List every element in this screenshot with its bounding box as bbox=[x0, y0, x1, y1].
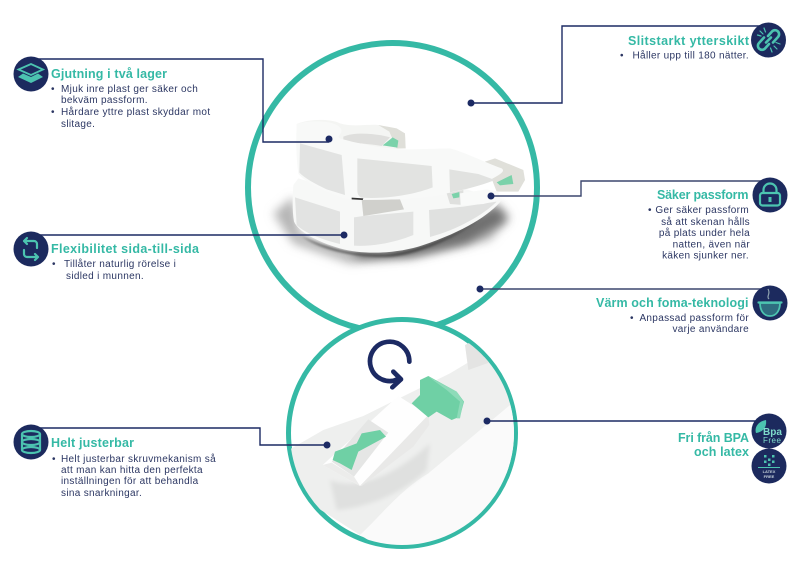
text block: Gjutning i två lager: Gjutning i två lager bbox=[51, 67, 167, 81]
large teal circle with mouthguard bbox=[38, 26, 770, 332]
text block: Flexibilitet sida-till-sida: Flexibilitet sida-till-sida bbox=[51, 242, 200, 256]
text block: Helt justerbar: • bbox=[52, 454, 56, 465]
callout: Säker passform connector line bbox=[488, 181, 770, 200]
text block: Värm och foma-teknologi: Anpassad passform för bbox=[639, 313, 749, 324]
text block: Slitstarkt ytterskikt bbox=[620, 34, 750, 62]
text block: Helt justerbar: inställningen för att behandla bbox=[61, 476, 199, 487]
icon: BPA free bbox=[752, 414, 786, 448]
text block: Slitstarkt ytterskikt: Håller upp till 180 nätter. bbox=[633, 50, 749, 62]
icon: BPA free: Bpa bbox=[763, 427, 782, 438]
text block: Gjutning i två lager: Mjuk inre plast ger säker och bbox=[61, 84, 198, 95]
small teal circle with screw detail bbox=[38, 317, 770, 563]
text block: Värm och foma-teknologi: Värm och foma-teknologi bbox=[596, 296, 748, 310]
text block: Säker passform: natten, även när bbox=[673, 240, 750, 250]
callout: Värm connector line bbox=[476, 286, 770, 292]
text block: Gjutning i två lager: slitage. bbox=[61, 119, 95, 130]
text block: Fri från BPA och latex bbox=[678, 431, 749, 459]
text block: Säker passform bbox=[648, 188, 750, 262]
icon: layers bbox=[14, 56, 48, 92]
text block: Säker passform: Säker passform bbox=[657, 188, 748, 202]
callout: Gjutning connector line bbox=[38, 59, 332, 142]
text block: Gjutning i två lager: • bbox=[51, 84, 55, 95]
text block: Säker passform: • bbox=[648, 205, 652, 216]
icon: latex free: LATEX bbox=[763, 469, 776, 474]
text block: Gjutning i två lager: • bbox=[51, 107, 55, 118]
mouthguard photo bbox=[273, 120, 525, 263]
text block: Helt justerbar: sina snarkningar. bbox=[61, 488, 142, 499]
text block: Flexibilitet sida-till-sida: Tillåter naturlig rörelse i bbox=[64, 258, 176, 270]
text block: Fri från BPA och latex: Fri från BPA bbox=[678, 431, 749, 445]
text block: Helt justerbar: att man kan hitta den perfekta bbox=[61, 465, 203, 476]
rotation arrow icon bbox=[370, 342, 409, 387]
text block: Helt justerbar: Helt justerbar skruvmekanism så bbox=[61, 453, 216, 465]
text block: Säker passform: käken sjunker ner. bbox=[662, 250, 749, 262]
text block: Flexibilitet sida-till-sida: • bbox=[52, 259, 56, 270]
callout: Slitstarkt connector line bbox=[468, 26, 770, 106]
icon: screw stack bbox=[14, 424, 48, 460]
icon: bowl with steam bbox=[752, 286, 788, 320]
adjustment screw photo bbox=[291, 339, 514, 545]
text block: Gjutning i två lager: Hårdare yttre plast skyddar mot bbox=[61, 106, 210, 118]
text block: Slitstarkt ytterskikt: • bbox=[620, 50, 624, 62]
icon: latex free: FREE bbox=[764, 474, 775, 479]
text block: Gjutning i två lager: bekväm passform. bbox=[61, 95, 148, 106]
text block: Säker passform: så att skenan hålls bbox=[661, 216, 750, 228]
text block: Gjutning i två lager bbox=[51, 67, 210, 130]
text block: Slitstarkt ytterskikt: Slitstarkt ytterskikt bbox=[628, 34, 750, 48]
icon: latex free bbox=[752, 448, 786, 484]
text block: Fri från BPA och latex: och latex bbox=[694, 445, 749, 459]
callout: BPA connector line bbox=[484, 418, 770, 424]
text block: Värm och foma-teknologi: varje användare bbox=[672, 324, 749, 335]
text block: Värm och foma-teknologi bbox=[596, 296, 749, 335]
text block: Helt justerbar: Helt justerbar bbox=[51, 436, 134, 450]
text block: Säker passform: på plats under hela bbox=[659, 227, 750, 239]
callout: Flexibilitet connector line bbox=[38, 232, 348, 238]
icon: side arrows bbox=[14, 232, 48, 266]
text block: Flexibilitet sida-till-sida bbox=[51, 242, 200, 282]
icon: BPA free: Free bbox=[763, 436, 782, 445]
icon: padlock bbox=[752, 178, 788, 212]
text block: Helt justerbar bbox=[51, 436, 216, 499]
text block: Värm och foma-teknologi: • bbox=[630, 313, 634, 324]
icon: chain link bbox=[751, 22, 786, 58]
callout: Helt justerbar connector line bbox=[38, 428, 330, 448]
text block: Flexibilitet sida-till-sida: sidled i munnen. bbox=[66, 271, 144, 282]
text block: Säker passform: Ger säker passform bbox=[655, 205, 749, 216]
